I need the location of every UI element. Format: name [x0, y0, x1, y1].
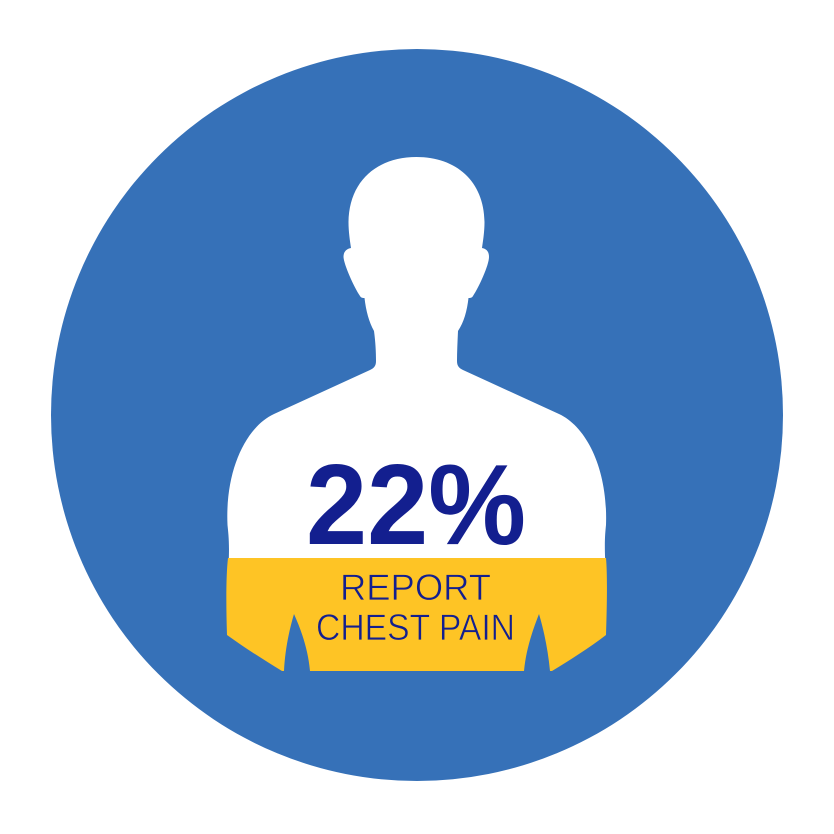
infographic [51, 49, 783, 781]
statistic: 22%: 22% [306, 442, 526, 569]
silhouette lower: yellow band [226, 558, 607, 671]
label line 1: REPORT [340, 566, 491, 608]
icon: person silhouette [226, 157, 607, 671]
label line 2: CHEST PAIN [316, 606, 515, 648]
background circle [51, 49, 783, 781]
silhouette upper: white [227, 157, 606, 575]
label: report chest pain [316, 566, 515, 648]
